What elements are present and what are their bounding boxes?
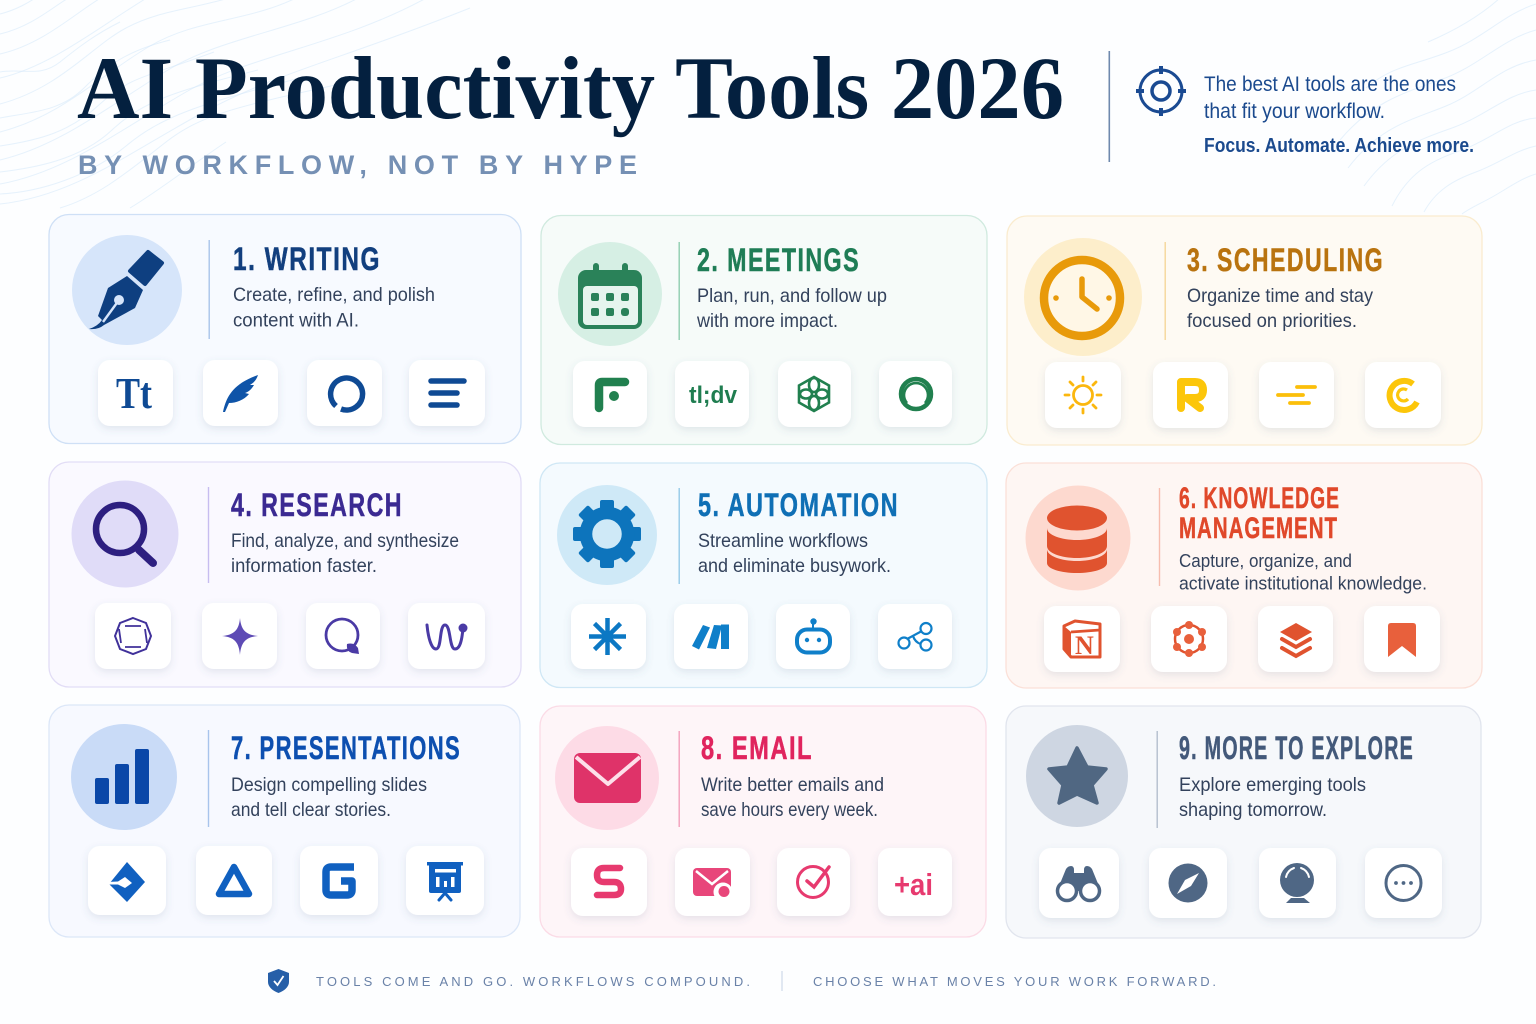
panel: 9 more to explore [1006,706,1481,938]
icon: shield [268,969,289,993]
description: content with AI. [233,310,359,332]
description: Create, refine, and polish [233,284,435,306]
tool: layers [1258,606,1333,672]
tool: check circle [777,848,850,916]
tool: molecule [1151,606,1227,672]
description: focused on priorities. [1187,310,1357,332]
tool: nodes [878,604,952,669]
tool: +ai [878,848,952,916]
heading: 5. AUTOMATION [698,487,899,523]
tool: ring [307,360,382,426]
tool: make bars [674,604,748,669]
tool: asterisk [571,604,646,669]
icon: database [1026,486,1130,590]
icon: clock [1024,238,1142,356]
header callout [1108,51,1474,162]
description [1179,774,1366,821]
description [696,285,887,332]
panel: 4 research [49,462,521,687]
tool: W mark [408,603,485,669]
tool: feather [203,360,278,426]
description: Streamline workflows [698,530,868,552]
panel: 2 meetings [541,216,987,444]
icon: gear [557,485,657,585]
description: shaping tomorrow. [1179,799,1327,821]
panel: 8 email [540,706,986,937]
heading: 8. EMAIL [701,730,813,766]
panel: 6 knowledge management [1006,463,1482,688]
icon: star [1026,725,1128,827]
tool: text lines [409,360,485,426]
tool: F mark [573,361,647,427]
heading [1179,482,1340,545]
header callout: that fit your workflow. [1204,100,1385,123]
tool: green ring [879,361,952,427]
subtitle: BY WORKFLOW, NOT BY HYPE [78,150,637,180]
tool: speed lines [1259,362,1334,428]
heading: 4. RESEARCH [231,487,403,523]
description: Write better emails and [701,774,884,796]
description: information faster. [231,555,377,577]
tool: notion cube: N [1075,631,1094,660]
tool: Q circle [306,603,380,669]
description: and tell clear stories. [231,799,391,821]
tool: mail reply [675,848,750,916]
tool: diamond [88,846,166,915]
tool: tl;dv: tl;dv [689,382,738,409]
tool: sparkle [202,603,277,669]
tool: more dots [1365,848,1442,918]
description: and eliminate busywork. [698,555,891,577]
icon: bar chart [71,724,177,830]
tool: S mark [571,848,647,916]
tool: notion cube [1044,606,1120,672]
icon: calendar [558,242,662,346]
tool: bookmark [1364,606,1440,672]
footer [268,969,1216,993]
tool: +ai: +ai [894,867,933,902]
heading: 7. PRESENTATIONS [231,730,461,766]
panel: 1 writing [49,214,521,444]
callout text: The best AI tools are the ones [1204,73,1456,96]
description: Plan, run, and follow up [697,285,887,307]
tool: compass [1149,848,1227,918]
tool: tl;dv [675,361,749,427]
tool: presentation board [406,846,484,915]
icon: magnifier [72,480,178,588]
panel: 3 scheduling [1007,216,1482,445]
description [231,774,427,821]
description: Design compelling slides [231,774,427,796]
callout emphasis: Focus. Automate. Achieve more. [1204,134,1474,157]
description [231,530,459,577]
tool: sun [1045,362,1121,428]
footer text right: CHOOSE WHAT MOVES YOUR WORK FORWARD. [813,974,1216,989]
tool: octagon [95,603,171,669]
description: save hours every week. [701,799,878,821]
description [233,284,435,332]
tool: Tt: Tt [116,369,152,418]
heading: 6. KNOWLEDGE [1179,482,1340,515]
tool: triangle [196,846,272,915]
description [1179,550,1427,594]
title: AI Productivity Tools 2026 [77,40,1064,138]
description [1187,285,1373,332]
footer text left: TOOLS COME AND GO. WORKFLOWS COMPOUND. [316,974,750,989]
panel: 7 presentations [49,705,520,937]
heading: 1. WRITING [233,241,381,277]
description [698,530,891,577]
tool: robot [776,604,850,669]
icon: envelope [555,726,659,830]
description [701,774,884,821]
description: Organize time and stay [1187,285,1373,307]
description: activate institutional knowledge. [1179,572,1427,594]
tool: C mark [1365,362,1441,428]
panel: 5 automation [540,463,987,688]
tool: hexagon flower [778,361,851,427]
tool: R mark [1153,362,1228,428]
tool: crystal ball [1259,848,1336,918]
description: with more impact. [696,310,838,332]
description: Explore emerging tools [1179,774,1366,796]
tool: Tt [98,360,173,426]
tool: binoculars [1039,848,1119,918]
heading: 2. MEETINGS [697,242,860,278]
icon: fountain pen [72,235,182,345]
heading: MANAGEMENT [1179,512,1338,545]
description: Find, analyze, and synthesize [231,530,459,552]
icon: target [1136,66,1186,116]
heading: 3. SCHEDULING [1187,242,1384,278]
tool: G mark [300,846,378,915]
description: Capture, organize, and [1179,550,1352,571]
